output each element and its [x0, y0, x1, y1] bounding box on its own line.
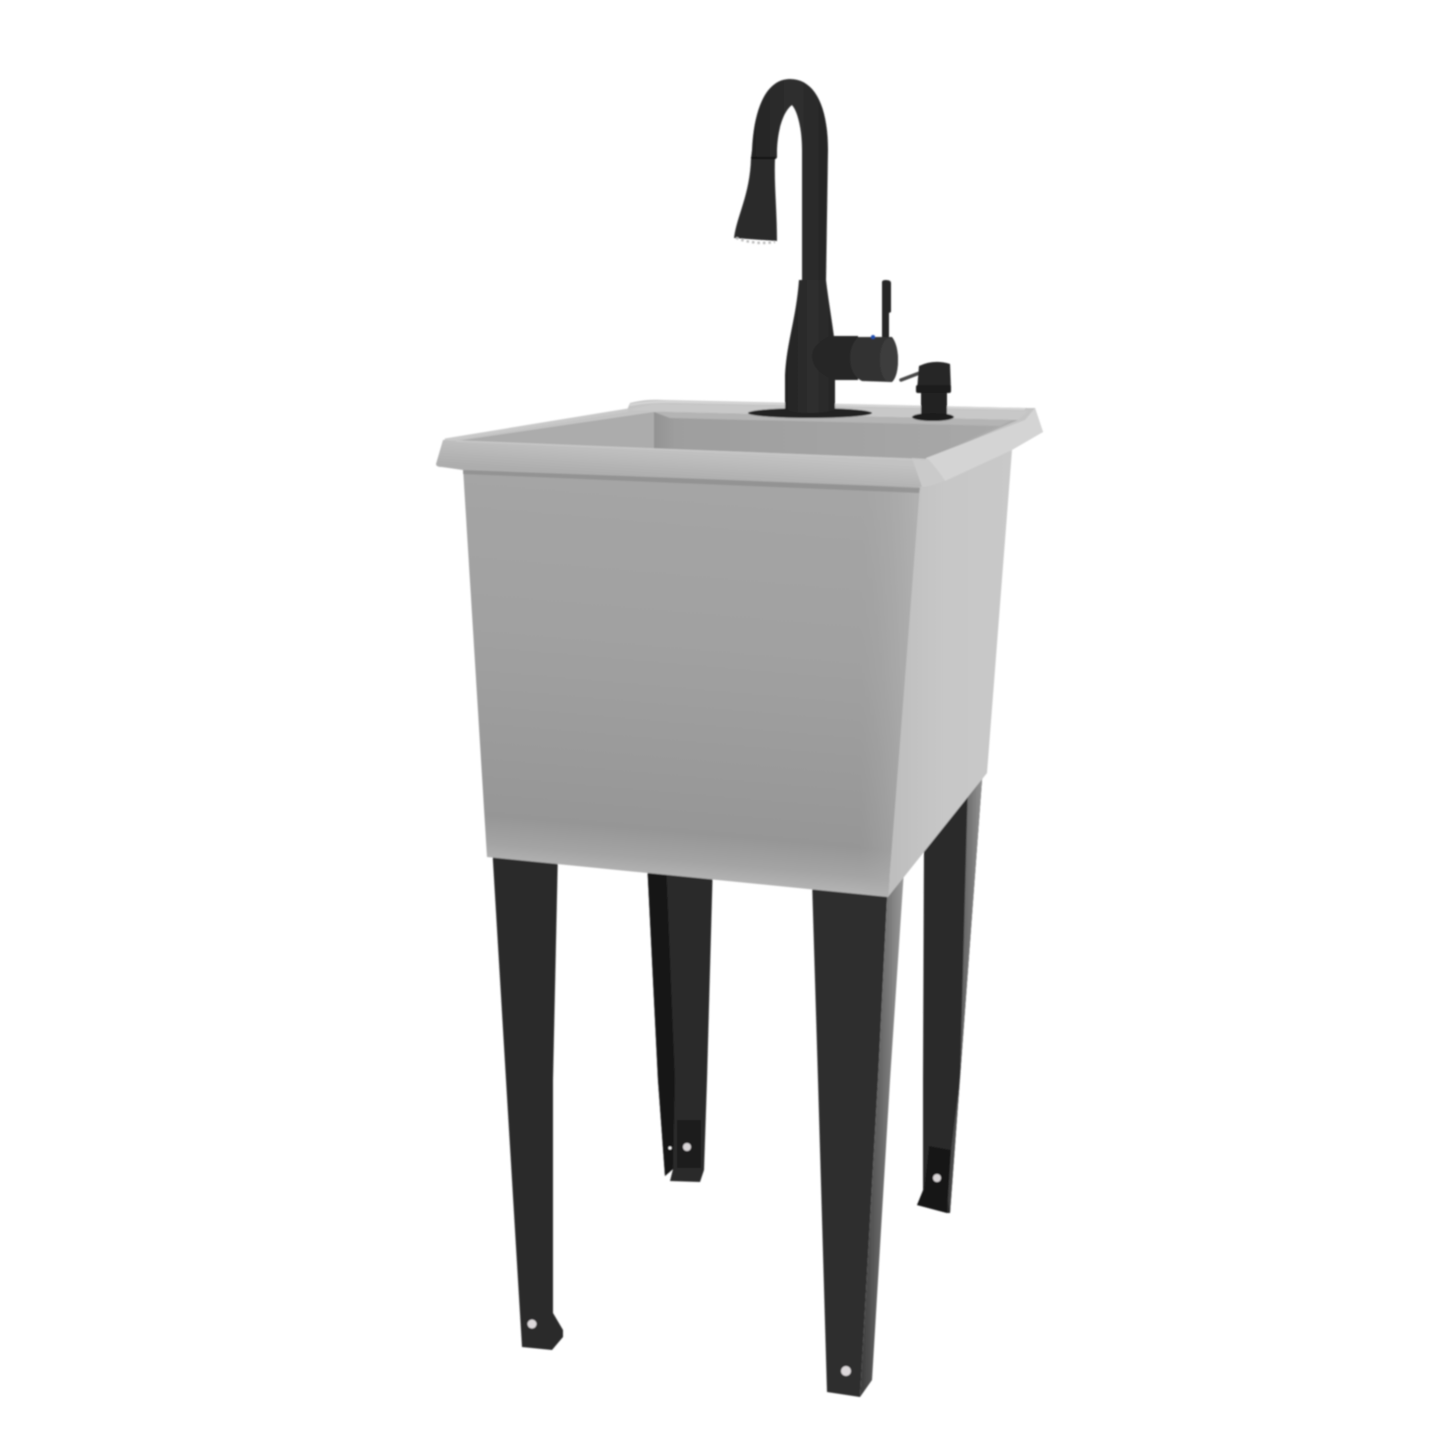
soap dispenser [901, 362, 954, 421]
leg: back right [917, 760, 985, 1213]
faucet cold indicator dot [871, 335, 875, 339]
leg: front right [812, 870, 904, 1397]
faucet [734, 79, 898, 418]
faucet gooseneck spout [751, 79, 828, 282]
sink assembly [436, 79, 1043, 1397]
tub rim [436, 408, 1043, 487]
faucet handle body [812, 336, 858, 380]
faucet escutcheon plate [748, 408, 872, 418]
faucet pull-down sprayer [734, 158, 777, 241]
leg: back centre [647, 860, 713, 1182]
faucet handle cap [850, 337, 898, 382]
rim: front band [436, 440, 945, 487]
rim: right strip [926, 408, 1043, 486]
faucet lever [882, 280, 891, 337]
rim: front corner highlight [912, 458, 945, 487]
faucet base column [785, 280, 835, 413]
tub body: front panel [463, 468, 922, 897]
tub interior and back rim [442, 400, 1043, 481]
tub body: front panel right shading [830, 484, 922, 897]
tub body: side panel [888, 450, 1012, 897]
tub body: shadow below rim [463, 469, 920, 493]
leg: front left [492, 845, 563, 1350]
